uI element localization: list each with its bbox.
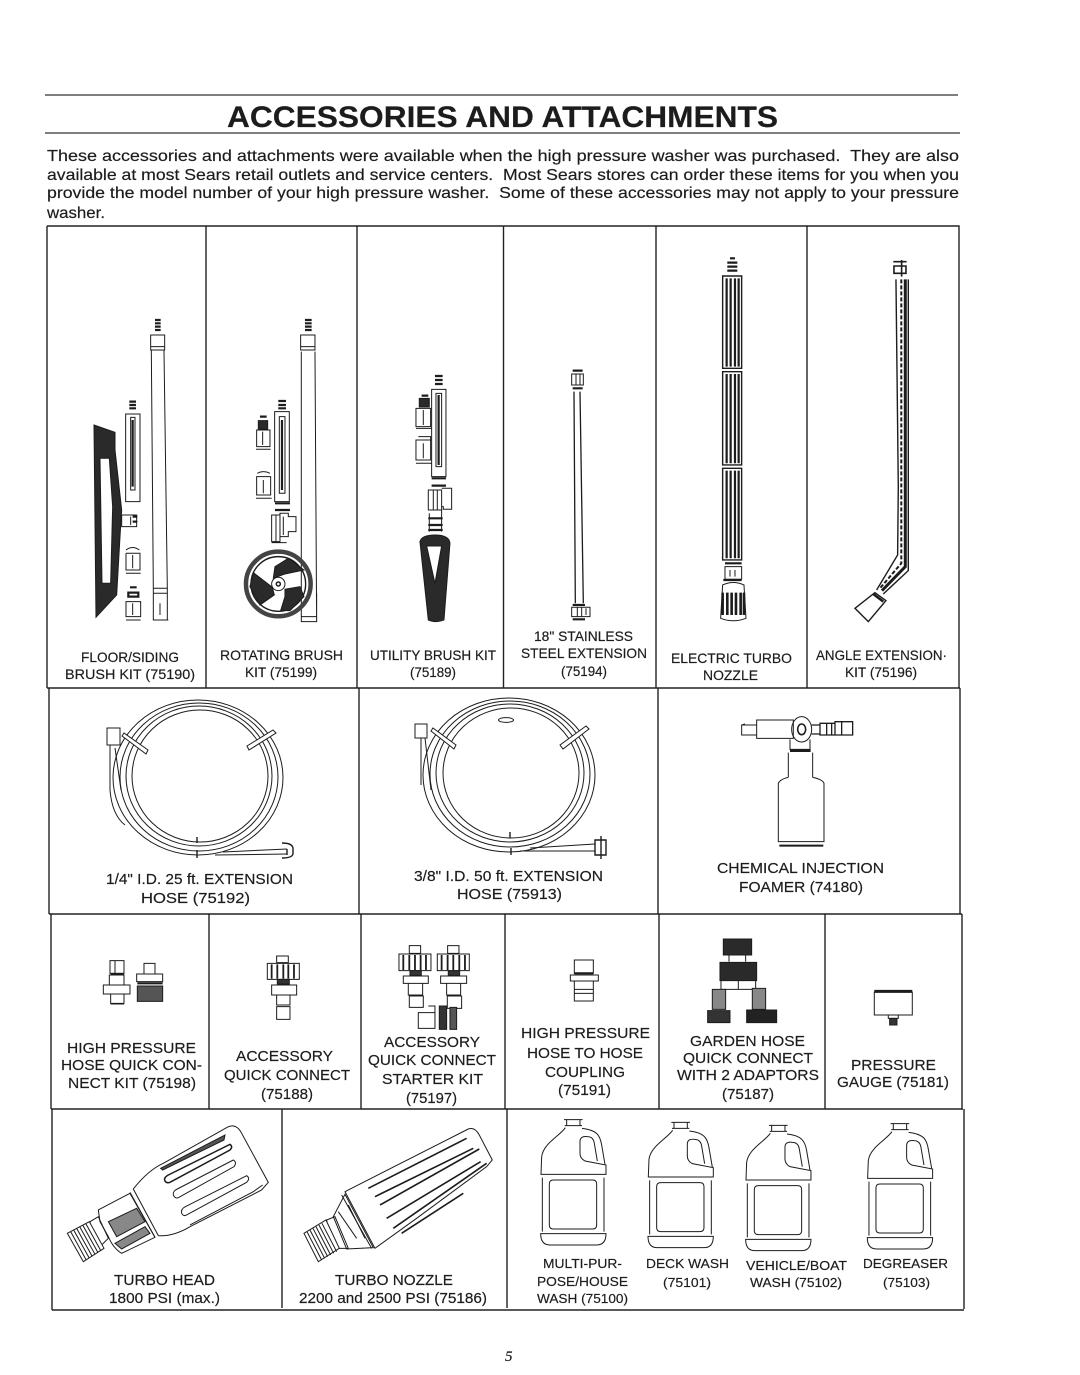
panel: 25 ft extension hose	[106, 700, 293, 907]
panel: accessory quick connect	[224, 956, 350, 1103]
label: high pressure hose quick connect kit: HIGH PRESSURE	[67, 1040, 196, 1057]
intro paragraph: These accessories and attachments were available when the high pressure washer was purchased. They are also	[47, 148, 959, 165]
icon: foamer bottle	[742, 717, 853, 846]
label: accessory quick connect: ACCESSORY	[236, 1048, 333, 1065]
label: 25 ft extension hose	[106, 871, 293, 907]
label: 25 ft extension hose: 1/4" I.D. 25 ft. EXTENSION	[106, 871, 293, 888]
label: accessory quick connect starter kit: STARTER KIT	[382, 1071, 483, 1088]
panel: electric turbo nozzle	[671, 258, 792, 683]
panel: stainless steel extension	[521, 371, 647, 679]
label: hose to hose coupling: HOSE TO HOSE	[527, 1045, 643, 1062]
label: deck wash	[646, 1256, 729, 1290]
panel: turbo nozzle	[299, 1128, 492, 1307]
label: 50 ft extension hose: HOSE (75913)	[457, 886, 562, 903]
label: multi-purpose house wash: MULTI-PUR-	[543, 1256, 622, 1271]
label: hose to hose coupling	[521, 1025, 650, 1099]
icon: rotating brush kit	[246, 320, 317, 622]
page number: 5	[505, 1349, 513, 1365]
panel: chemical injection foamer	[717, 717, 884, 896]
label: utility brush kit: (75189)	[410, 664, 456, 680]
icon: coupling	[570, 960, 598, 1001]
label: chemical injection foamer: FOAMER (74180)	[739, 879, 863, 896]
label: floor/siding brush kit	[65, 649, 195, 682]
icon: jug vehicle/boat wash	[746, 1125, 811, 1251]
icon: quick connect kit	[103, 961, 163, 1004]
label: 25 ft extension hose: HOSE (75192)	[141, 890, 250, 907]
label: stainless steel extension: 18" STAINLESS	[534, 628, 633, 644]
icon: floor/siding brush kit	[94, 320, 168, 620]
label: floor/siding brush kit: BRUSH KIT (75190)	[65, 666, 195, 682]
panel: accessory quick connect starter kit	[368, 946, 496, 1107]
label: rotating brush kit: KIT (75199)	[245, 664, 317, 680]
label: garden hose quick connect: QUICK CONNECT	[683, 1050, 813, 1067]
label: pressure gauge: GAUGE (75181)	[837, 1074, 949, 1091]
label: degreaser: DEGREASER	[863, 1256, 948, 1271]
label: turbo head: TURBO HEAD	[114, 1272, 215, 1289]
label: stainless steel extension	[521, 628, 647, 679]
label: utility brush kit: UTILITY BRUSH KIT	[370, 647, 496, 663]
label: deck wash: (75101)	[663, 1275, 711, 1290]
label: accessory quick connect: QUICK CONNECT	[224, 1067, 350, 1084]
label: garden hose quick connect	[677, 1033, 819, 1103]
label: accessory quick connect starter kit: QUICK CONNECT	[368, 1052, 496, 1069]
icon: electric turbo nozzle	[721, 258, 746, 621]
label: hose to hose coupling: (75191)	[558, 1082, 611, 1099]
panel: utility brush kit	[370, 376, 496, 680]
panel: high pressure hose quick connect kit	[61, 961, 202, 1092]
panel: vehicle/boat wash	[746, 1125, 847, 1290]
label: floor/siding brush kit: FLOOR/SIDING	[81, 649, 179, 665]
panel: rotating brush kit	[220, 320, 343, 680]
label: accessory quick connect: (75188)	[261, 1086, 313, 1103]
label: angle extension kit: KIT (75196)	[845, 664, 917, 680]
icon: turbo head	[67, 1126, 268, 1262]
label: degreaser	[863, 1256, 948, 1290]
label: vehicle/boat wash: VEHICLE/BOAT	[746, 1258, 847, 1273]
label: multi-purpose house wash	[537, 1256, 628, 1306]
icon: stainless steel extension	[572, 371, 590, 619]
icon: quick connect fitting	[267, 956, 299, 1019]
panel: pressure gauge	[837, 991, 949, 1091]
label: turbo nozzle: TURBO NOZZLE	[335, 1272, 453, 1289]
table frame	[47, 226, 964, 1310]
label: garden hose quick connect: GARDEN HOSE	[690, 1033, 805, 1050]
label: accessory quick connect starter kit: ACCESSORY	[384, 1034, 480, 1051]
label: 50 ft extension hose	[414, 868, 603, 903]
icon: garden hose Y connector	[708, 939, 777, 1023]
label: high pressure hose quick connect kit: HOSE QUICK CON-	[61, 1057, 202, 1074]
label: pressure gauge	[837, 1057, 949, 1091]
intro paragraph	[46, 148, 959, 222]
icon: starter kit fittings	[399, 946, 469, 1029]
panel: deck wash	[646, 1122, 729, 1290]
icon: pressure gauge	[874, 991, 912, 1025]
label: multi-purpose house wash: WASH (75100)	[537, 1291, 628, 1306]
label: utility brush kit	[370, 647, 496, 680]
label: chemical injection foamer: CHEMICAL INJECTION	[717, 860, 884, 877]
label: high pressure hose quick connect kit	[61, 1040, 202, 1092]
title: ACCESSORIES AND ATTACHMENTS	[227, 101, 778, 134]
label: rotating brush kit: ROTATING BRUSH	[220, 647, 343, 663]
label: turbo nozzle: 2200 and 2500 PSI (75186)	[299, 1290, 487, 1307]
panel: degreaser	[863, 1124, 948, 1290]
label: multi-purpose house wash: POSE/HOUSE	[537, 1274, 628, 1289]
label: hose to hose coupling: COUPLING	[545, 1064, 625, 1081]
icon: utility brush kit	[416, 376, 452, 622]
icon: 25 ft hose coil	[107, 700, 293, 858]
panel: hose to hose coupling	[521, 960, 650, 1099]
label: pressure gauge: PRESSURE	[851, 1057, 936, 1074]
label: deck wash: DECK WASH	[646, 1256, 729, 1271]
label: high pressure hose quick connect kit: NECT KIT (75198)	[68, 1075, 196, 1092]
label: accessory quick connect starter kit	[368, 1034, 496, 1107]
label: vehicle/boat wash	[746, 1258, 847, 1290]
label: angle extension kit	[816, 647, 947, 680]
label: stainless steel extension: STEEL EXTENSION	[521, 645, 647, 661]
label: angle extension kit: ANGLE EXTENSION·	[816, 647, 947, 663]
label: vehicle/boat wash: WASH (75102)	[750, 1275, 842, 1290]
panel: floor/siding brush kit	[65, 320, 195, 682]
panel: multi-purpose house wash	[537, 1120, 628, 1306]
intro paragraph: provide the model number of your high pressure washer. Some of these accessories may not apply to your pressure	[47, 185, 959, 202]
label: garden hose quick connect: (75187)	[722, 1086, 774, 1103]
label: accessory quick connect	[224, 1048, 350, 1103]
icon: 50 ft hose coil	[415, 698, 606, 859]
label: hose to hose coupling: HIGH PRESSURE	[521, 1025, 650, 1042]
panel: angle extension kit	[816, 260, 947, 680]
icon: jug deck wash	[648, 1122, 713, 1248]
panel: 50 ft extension hose	[414, 698, 606, 903]
label: chemical injection foamer	[717, 860, 884, 896]
label: garden hose quick connect: WITH 2 ADAPTORS	[677, 1067, 819, 1084]
label: rotating brush kit	[220, 647, 343, 680]
icon: jug multi-purpose	[541, 1120, 606, 1245]
icon: jug degreaser	[867, 1124, 933, 1249]
label: electric turbo nozzle	[671, 650, 792, 683]
intro paragraph: washer.	[46, 205, 105, 222]
label: turbo nozzle	[299, 1272, 487, 1307]
label: 50 ft extension hose: 3/8" I.D. 50 ft. EXTENSION	[414, 868, 603, 885]
intro paragraph: available at most Sears retail outlets and service centers. Most Sears stores can order these items for you when you	[47, 167, 959, 184]
panel: garden hose quick connect	[677, 939, 819, 1103]
icon: angle extension kit	[855, 260, 908, 622]
label: turbo head	[109, 1272, 220, 1307]
label: turbo head: 1800 PSI (max.)	[109, 1290, 220, 1307]
label: stainless steel extension: (75194)	[561, 663, 607, 679]
label: accessory quick connect starter kit: (75197)	[406, 1090, 457, 1107]
panel: turbo head	[67, 1126, 268, 1307]
label: electric turbo nozzle: NOZZLE	[703, 667, 758, 683]
label: electric turbo nozzle: ELECTRIC TURBO	[671, 650, 792, 666]
label: degreaser: (75103)	[883, 1275, 930, 1290]
icon: turbo nozzle	[304, 1128, 492, 1262]
